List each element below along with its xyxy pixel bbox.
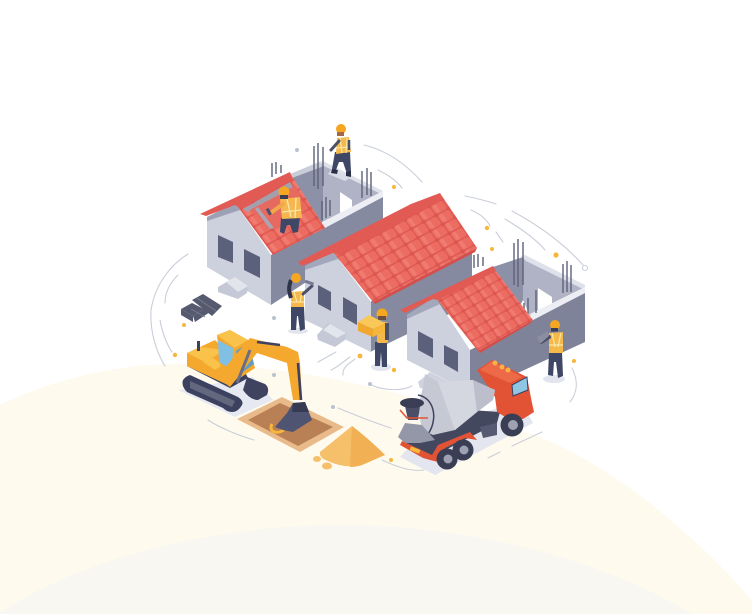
rebar xyxy=(272,143,371,220)
under-body xyxy=(187,354,248,388)
worker carrying box xyxy=(358,308,391,371)
boom xyxy=(217,338,302,400)
sand pile xyxy=(313,426,385,470)
interior left wall xyxy=(290,163,323,232)
windows xyxy=(318,285,331,311)
interior left wall xyxy=(493,257,523,325)
windows xyxy=(218,235,233,263)
excavation pit xyxy=(237,397,344,452)
gable wall xyxy=(305,252,371,352)
house 3 xyxy=(400,239,585,395)
body xyxy=(187,340,245,386)
door opening xyxy=(340,192,352,217)
hopper xyxy=(405,406,420,420)
interior right wall xyxy=(323,163,383,226)
front track xyxy=(182,375,242,412)
steps xyxy=(418,372,450,392)
roof xyxy=(333,193,477,302)
side wall xyxy=(470,292,585,395)
door opening xyxy=(538,288,552,312)
concrete mixer truck xyxy=(398,360,534,475)
house 1 xyxy=(200,143,383,305)
side wall xyxy=(271,197,383,305)
interior right wall xyxy=(523,257,584,316)
red fenders xyxy=(400,432,477,462)
worker on right xyxy=(537,320,565,383)
background hill: cream xyxy=(0,364,752,614)
cab xyxy=(477,360,534,419)
gable wall xyxy=(407,297,470,392)
motion lines and dots xyxy=(151,145,588,470)
top rim back wall xyxy=(319,161,383,195)
shadow xyxy=(400,400,533,475)
chassis xyxy=(405,410,500,458)
mixer frame xyxy=(398,423,435,443)
concrete blocks xyxy=(181,294,222,322)
background hill: pale grey xyxy=(0,525,692,614)
bucket xyxy=(275,402,312,432)
top rim back wall xyxy=(521,255,585,290)
rear track xyxy=(243,377,268,400)
house 2 xyxy=(298,193,477,352)
mixer drum xyxy=(418,374,495,435)
side wall xyxy=(370,246,472,352)
excavator xyxy=(178,330,312,432)
worker laying roof tiles xyxy=(266,186,302,234)
gable wall xyxy=(207,203,271,305)
wheels xyxy=(436,448,458,470)
worker with trowel xyxy=(288,273,314,334)
cab xyxy=(217,330,255,378)
steps xyxy=(218,277,248,299)
worker on wall xyxy=(328,124,352,181)
shadow xyxy=(178,377,273,417)
windows xyxy=(418,331,433,358)
fuel tank xyxy=(480,423,497,438)
rebar xyxy=(474,239,571,315)
roof xyxy=(435,267,533,351)
roof xyxy=(235,173,325,255)
steps xyxy=(317,323,347,347)
box xyxy=(358,315,385,337)
